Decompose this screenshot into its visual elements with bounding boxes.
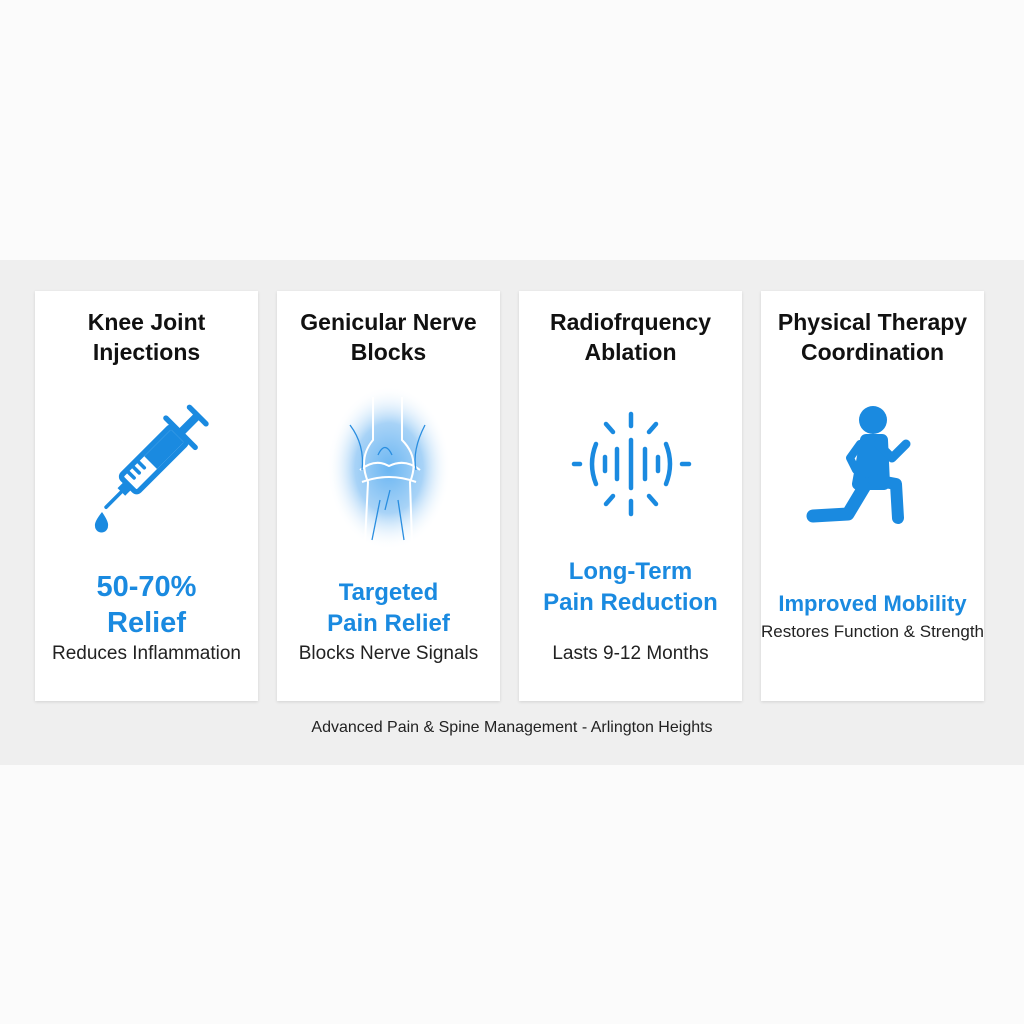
card: radiofrequency ablation: Radiofrquency: [550, 309, 711, 335]
card: radiofrequency ablation: Ablation: [584, 339, 676, 365]
icon: syringe: [94, 404, 209, 532]
card: knee joint injections: [35, 291, 258, 701]
card: genicular nerve blocks: [277, 291, 500, 701]
card: physical therapy coordination: Coordination: [801, 339, 944, 365]
card: radiofrequency ablation: [519, 291, 742, 701]
card: radiofrequency ablation: Lasts 9-12 Months: [552, 643, 709, 664]
card: genicular nerve blocks: Pain Relief: [327, 610, 450, 637]
card: genicular nerve blocks: Blocks: [351, 339, 426, 365]
card: physical therapy coordination: Physical Therapy: [778, 309, 967, 335]
stat: [97, 571, 196, 639]
footer text: Advanced Pain & Spine Management - Arlington Heights: [311, 719, 713, 736]
title: Knee Joint: [88, 309, 205, 335]
subtext: Reduces Inflammation: [52, 643, 241, 664]
card: genicular nerve blocks: Genicular Nerve: [300, 309, 477, 335]
icon: knee nerve illustration: [336, 397, 442, 540]
icon: runner: [806, 406, 910, 524]
card: physical therapy coordination: Restores Function & Strength: [761, 622, 984, 641]
card: physical therapy coordination: [761, 291, 984, 701]
card: genicular nerve blocks: Targeted: [339, 579, 438, 606]
icon: radio waves: [572, 412, 692, 516]
stat: Relief: [107, 607, 186, 639]
stat: 50-70%: [97, 571, 196, 603]
title: Injections: [93, 339, 200, 365]
card: genicular nerve blocks: Blocks Nerve Signals: [299, 643, 478, 664]
title: [88, 309, 205, 365]
card: physical therapy coordination: Improved Mobility: [778, 591, 967, 616]
card: radiofrequency ablation: Pain Reduction: [543, 589, 718, 616]
card: radiofrequency ablation: Long-Term: [569, 558, 692, 585]
